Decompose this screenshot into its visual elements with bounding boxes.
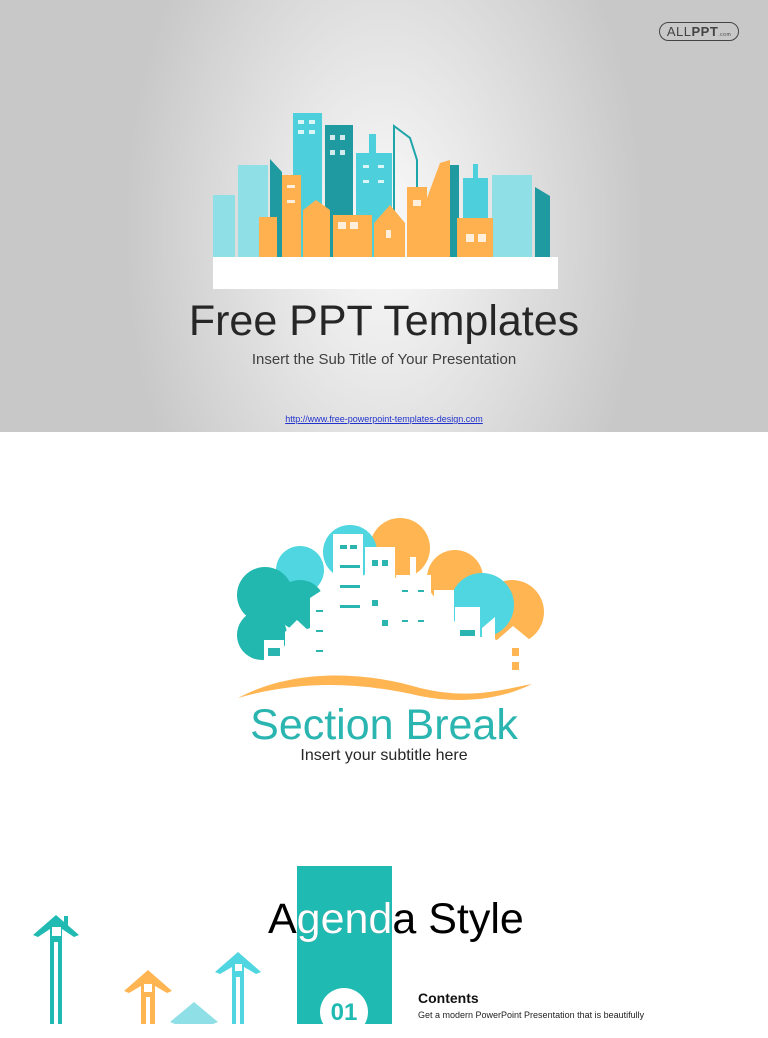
- subtitle: Insert the Sub Title of Your Presentation: [252, 351, 516, 368]
- white banner: [213, 257, 558, 289]
- logo: ALLPPT: ALLPPT.com: [667, 24, 731, 39]
- contents heading: Contents: [418, 990, 479, 1006]
- illustration: city skyline: [213, 113, 558, 289]
- logo: ALLPPT: [659, 22, 739, 41]
- panel: section break: [237, 518, 544, 764]
- panel: agenda: [33, 866, 644, 1026]
- subtitle: Insert your subtitle here: [300, 747, 468, 764]
- heading: Section Break: Section Break: [250, 701, 518, 749]
- illustration: house arrows: [33, 915, 261, 1024]
- number circle 01: [320, 988, 368, 1036]
- illustration: city in clouds: [237, 518, 544, 700]
- panel: title slide: [0, 0, 768, 432]
- number circle 01: 01: [331, 999, 357, 1026]
- teal bar: [297, 866, 392, 1024]
- heading: Agenda Style: Agenda Style: [268, 895, 524, 943]
- title: Free PPT Templates: [189, 297, 579, 345]
- link: http://www.free-powerpoint-templates-design.com: [285, 414, 483, 424]
- contents text: Get a modern PowerPoint Presentation that is beautifully: [418, 1010, 644, 1020]
